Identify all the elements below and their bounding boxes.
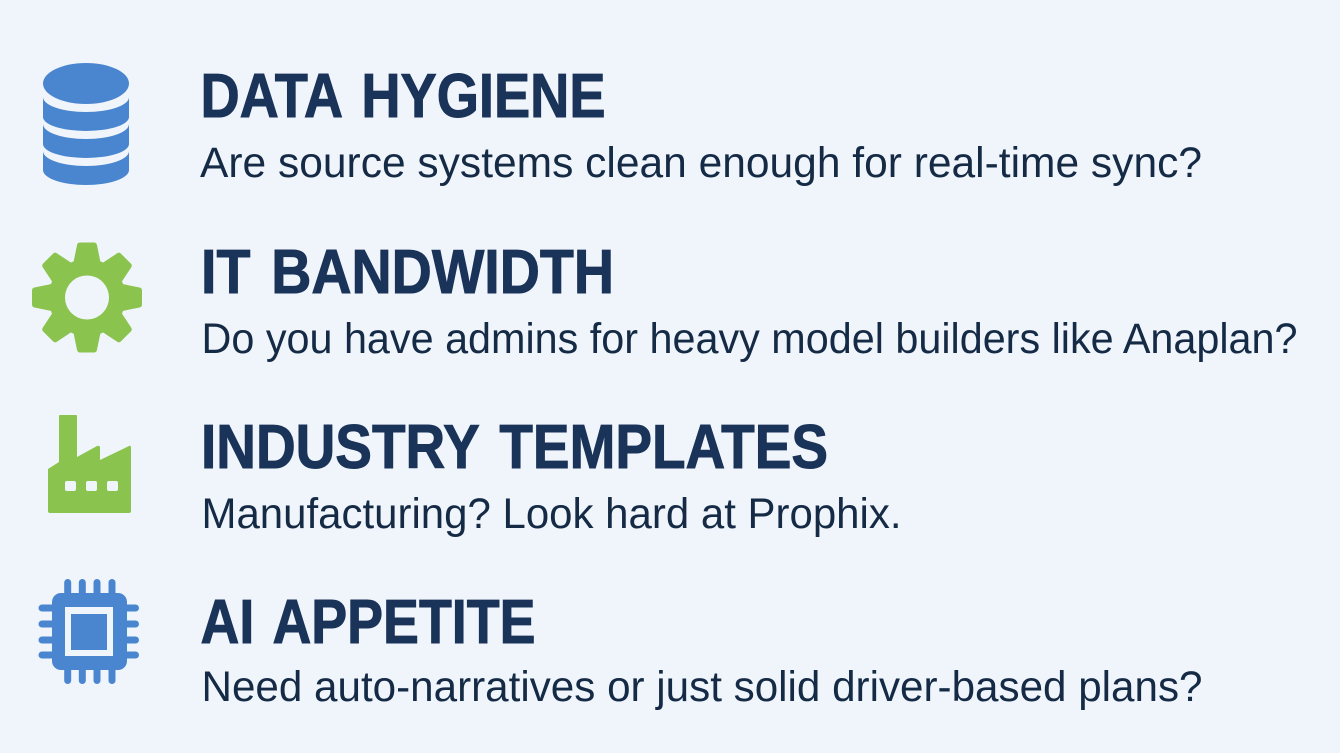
icon: chip [42,582,136,680]
row: it bandwidth [35,238,1298,363]
heading: industry templates: INDUSTRY TEMPLATES [201,413,828,482]
text: data hygiene question: Are source systems clean enough for real-time sync? [200,139,1202,187]
text: ai appetite question: Need auto-narratives or just solid driver-based plans? [202,663,1202,711]
heading: it bandwidth: IT BANDWIDTH [201,238,614,307]
heading: data hygiene: DATA HYGIENE [200,62,606,131]
row: ai appetite [42,582,1202,711]
icon: factory [48,415,131,513]
row: data hygiene [43,62,1202,187]
heading: ai appetite: AI APPETITE [200,588,536,657]
row: industry templates [48,413,902,538]
icon: database [43,63,129,185]
text: industry templates question: Manufacturing? Look hard at Prophix. [202,490,902,538]
text: it bandwidth question: Do you have admins for heavy model builders like Anaplan? [202,315,1298,363]
icon: gear [35,246,139,350]
